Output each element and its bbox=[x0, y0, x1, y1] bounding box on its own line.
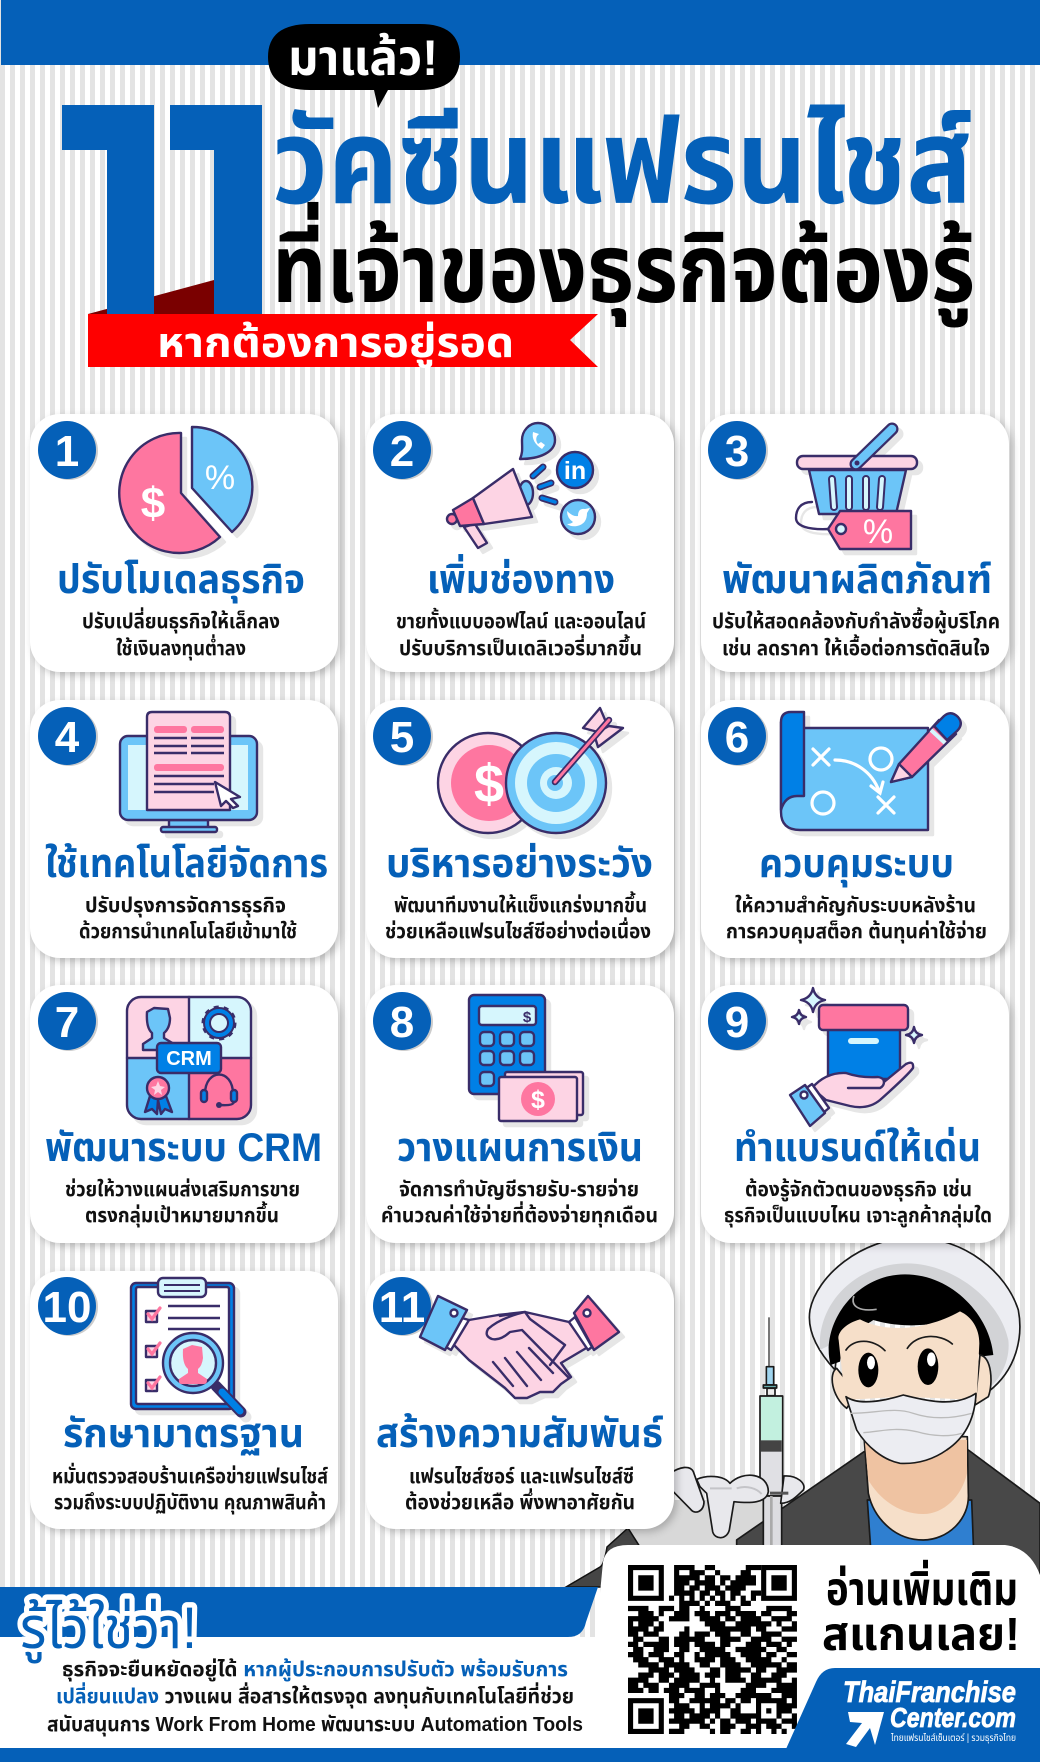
description: แฟรนไชส์ซอร์ และแฟรนไชส์ซี bbox=[409, 1466, 634, 1488]
heading: ปรับโมเดลธุรกิจ bbox=[57, 558, 305, 604]
icon: plan map and pencil bbox=[781, 712, 961, 830]
glove bbox=[670, 1467, 804, 1538]
brows bbox=[846, 1336, 952, 1351]
description: ปรับปรุงการจัดการธุรกิจ bbox=[85, 895, 286, 917]
number badge 5: 5 bbox=[390, 713, 414, 762]
description bbox=[396, 608, 646, 660]
neck shadow bbox=[865, 1440, 967, 1514]
icon: basket with tag bbox=[796, 429, 917, 551]
bottom blue bar bbox=[0, 1748, 1040, 1762]
speech bubble: มาแล้ว: มาแล้ว! bbox=[288, 30, 438, 86]
panel: card 9 bbox=[701, 985, 1009, 1243]
icon: calculator and money: $ bbox=[531, 1086, 545, 1114]
heading: รักษามาตรฐาน bbox=[63, 1412, 304, 1456]
panel: card 5 bbox=[366, 700, 674, 958]
number badge 8: 8 bbox=[390, 998, 414, 1047]
note text: ธุรกิจจะยืนหยัดอยู่ได้ หากผู้ประกอบการปรับตัว พร้อมรับการ bbox=[62, 1659, 568, 1681]
number badge 4 bbox=[38, 707, 98, 766]
icon: hand holding box bbox=[790, 988, 922, 1126]
panel: card 6 bbox=[701, 700, 1009, 958]
panel: card 8 bbox=[366, 985, 674, 1243]
panel: card 3 bbox=[701, 414, 1009, 672]
QR code bbox=[628, 1568, 797, 1731]
icon: monitor with document bbox=[120, 712, 257, 832]
number badge 7 bbox=[38, 992, 98, 1051]
heading: ทำแบรนด์ให้เด่น bbox=[734, 1125, 981, 1170]
hair bbox=[829, 1274, 993, 1365]
icon: basket with tag: % bbox=[863, 513, 893, 551]
panel: card 7 bbox=[30, 985, 338, 1243]
description bbox=[405, 1466, 635, 1514]
icon: clipboard and magnifier bbox=[131, 1278, 241, 1412]
icon: megaphone and social bbox=[447, 423, 595, 548]
icon: pie chart: % bbox=[205, 459, 235, 497]
note text: เปลี่ยนแปลง วางแผน สื่อสารให้ตรงจุด ลงทุนกับเทคโนโลยีที่ช่วย bbox=[56, 1682, 574, 1708]
syringe bbox=[760, 1317, 783, 1593]
description bbox=[65, 1179, 300, 1227]
description: ต้องช่วยเหลือ พึ่งพาอาศัยกัน bbox=[405, 1488, 635, 1514]
icon: handshake bbox=[420, 1296, 619, 1398]
number badge 7: 7 bbox=[55, 998, 79, 1047]
number badge 1: 1 bbox=[55, 427, 79, 476]
number badge 10 bbox=[38, 1277, 98, 1336]
description: ช่วยให้วางแผนส่งเสริมการขาย bbox=[65, 1179, 300, 1201]
description bbox=[52, 1463, 328, 1514]
mask bbox=[846, 1393, 976, 1463]
number badge 11: 11 bbox=[379, 1283, 425, 1332]
number badge 10: 10 bbox=[43, 1283, 91, 1332]
heading: เพิ่มช่องทาง bbox=[427, 553, 615, 602]
icon: pie chart bbox=[119, 427, 252, 553]
description bbox=[82, 607, 280, 660]
number badge 6: 6 bbox=[725, 713, 749, 762]
read more text: สแกนเลย! bbox=[822, 1608, 1020, 1660]
icon: pie chart: $ bbox=[141, 479, 165, 528]
icon: CRM tile bbox=[127, 997, 251, 1119]
note text: สนับสนุนการ Work From Home พัฒนาระบบ Automation Tools bbox=[47, 1714, 583, 1736]
heading: วางแผนการเงิน bbox=[397, 1126, 643, 1170]
logo: ThaiFranchise Center bbox=[786, 1668, 1040, 1749]
description: จัดการทำบัญชีรายรับ-รายจ่าย bbox=[399, 1179, 639, 1201]
eyes bbox=[858, 1348, 938, 1387]
description: เช่น ลดราคา ให้เอื้อต่อการตัดสินใจ bbox=[722, 634, 990, 660]
icon: CRM tile: CRM bbox=[166, 1048, 212, 1070]
neck bbox=[864, 1437, 968, 1540]
number badge 11 bbox=[373, 1277, 433, 1336]
icon: megaphone and social: in bbox=[564, 457, 586, 485]
description bbox=[381, 1179, 658, 1227]
description: รวมถึงระบบปฏิบัติงาน คุณภาพสินค้า bbox=[54, 1492, 326, 1514]
icon: calculator and money: $ bbox=[523, 1009, 532, 1026]
big number 11 bbox=[62, 105, 262, 314]
jacket bbox=[737, 1450, 1040, 1587]
heading: พัฒนาระบบ CRM bbox=[45, 1126, 322, 1170]
heading: บริหารอย่างระวัง bbox=[386, 841, 653, 886]
red ribbon subtitle: หากต้องการอยู่รอด bbox=[157, 319, 514, 368]
panel: card 1 bbox=[30, 414, 338, 672]
face bbox=[838, 1311, 979, 1400]
bottom white note area bbox=[0, 1637, 620, 1749]
description: หมั่นตรวจสอบร้านเครือข่ายแฟรนไชส์ bbox=[52, 1463, 328, 1488]
hair highlight bbox=[853, 1296, 877, 1310]
number badge 2: 2 bbox=[390, 427, 414, 476]
number badge 5 bbox=[373, 707, 433, 766]
ear left bbox=[832, 1368, 857, 1408]
description: คำนวณค่าใช้จ่ายที่ต้องจ่ายทุกเดือน bbox=[381, 1201, 658, 1227]
panel: card 11 bbox=[366, 1271, 674, 1529]
description: ขายทั้งแบบออฟไลน์ และออนไลน์ bbox=[396, 608, 646, 633]
heading: สร้างความสัมพันธ์ bbox=[376, 1411, 664, 1456]
description: การควบคุมสต็อก ต้นทุนค่าใช้จ่าย bbox=[726, 920, 987, 943]
description: ปรับเปลี่ยนธุรกิจให้เล็กลง bbox=[82, 607, 280, 633]
icon: coin and target bbox=[438, 708, 623, 833]
number badge 2 bbox=[373, 421, 433, 480]
description: ด้วยการนำเทคโนโลยีเข้ามาใช้ bbox=[79, 921, 297, 943]
description bbox=[726, 895, 987, 943]
hat bbox=[809, 1237, 1020, 1392]
number badge 3: 3 bbox=[725, 427, 749, 476]
top blue bar bbox=[1, 0, 1040, 65]
panel: card 2 bbox=[366, 414, 674, 672]
description: ใช้เงินลงทุนต่ำลง bbox=[116, 634, 246, 660]
description: ต้องรู้จักตัวตนของธุรกิจ เช่น bbox=[745, 1179, 972, 1201]
bottom blue banner bbox=[0, 1587, 598, 1637]
description bbox=[712, 607, 1000, 660]
number badge 1 bbox=[38, 421, 98, 480]
note text bbox=[47, 1659, 583, 1736]
icon: coin and target: $ bbox=[474, 754, 504, 814]
number badge 4: 4 bbox=[55, 713, 80, 762]
description: ตรงกลุ่มเป้าหมายมากขึ้น bbox=[85, 1201, 279, 1227]
description: ปรับให้สอดคล้องกับกำลังซื้อผู้บริโภค bbox=[712, 607, 1000, 633]
description: ธุรกิจเป็นแบบไหน เจาะลูกค้ากลุ่มใด bbox=[724, 1204, 992, 1227]
read more text bbox=[822, 1560, 1020, 1660]
panel: card 10 bbox=[30, 1271, 338, 1529]
description bbox=[385, 891, 651, 943]
panel: QR and read more bbox=[585, 1545, 1040, 1750]
number badge 6 bbox=[708, 707, 768, 766]
panel: card 4 bbox=[30, 700, 338, 958]
heading: ควบคุมระบบ bbox=[759, 842, 954, 888]
description: ปรับบริการเป็นเดลิเวอรี่มากขึ้น bbox=[399, 634, 642, 660]
icon: calculator and money bbox=[469, 995, 583, 1121]
title line 1: วัคซีนแฟรนไชส์ bbox=[272, 97, 972, 229]
logo: ThaiFranchise Center: Center.com bbox=[890, 1702, 1016, 1733]
description: ให้ความสำคัญกับระบบหลังร้าน bbox=[735, 895, 976, 917]
description: ช่วยเหลือแฟรนไชส์ซีอย่างต่อเนื่อง bbox=[385, 917, 651, 943]
ear right bbox=[975, 1355, 991, 1405]
note heading: รู้ไว้ใช่ว่า! bbox=[20, 1596, 197, 1663]
description: พัฒนาทีมงานให้แข็งแกร่งมากขึ้น bbox=[394, 891, 647, 917]
illustration: masked man with syringe bbox=[566, 1237, 1040, 1593]
heading: พัฒนาผลิตภัณฑ์ bbox=[722, 558, 992, 602]
number badge 8 bbox=[373, 992, 433, 1051]
red ribbon subtitle bbox=[88, 314, 598, 368]
number badge 9 bbox=[708, 992, 768, 1051]
shirt bbox=[867, 1500, 975, 1587]
logo: ThaiFranchise Center: ไทยแฟรนไชส์เซ็นเตอร์ | รวมธุรกิจไทย bbox=[890, 1731, 1016, 1744]
speech bubble: มาแล้ว bbox=[268, 24, 460, 108]
hat band shade bbox=[820, 1263, 1009, 1388]
number badge 9: 9 bbox=[725, 998, 749, 1047]
description bbox=[79, 895, 297, 943]
heading: ใช้เทคโนโลยีจัดการ bbox=[45, 841, 328, 886]
description bbox=[724, 1179, 992, 1227]
number badge 3 bbox=[708, 421, 768, 480]
